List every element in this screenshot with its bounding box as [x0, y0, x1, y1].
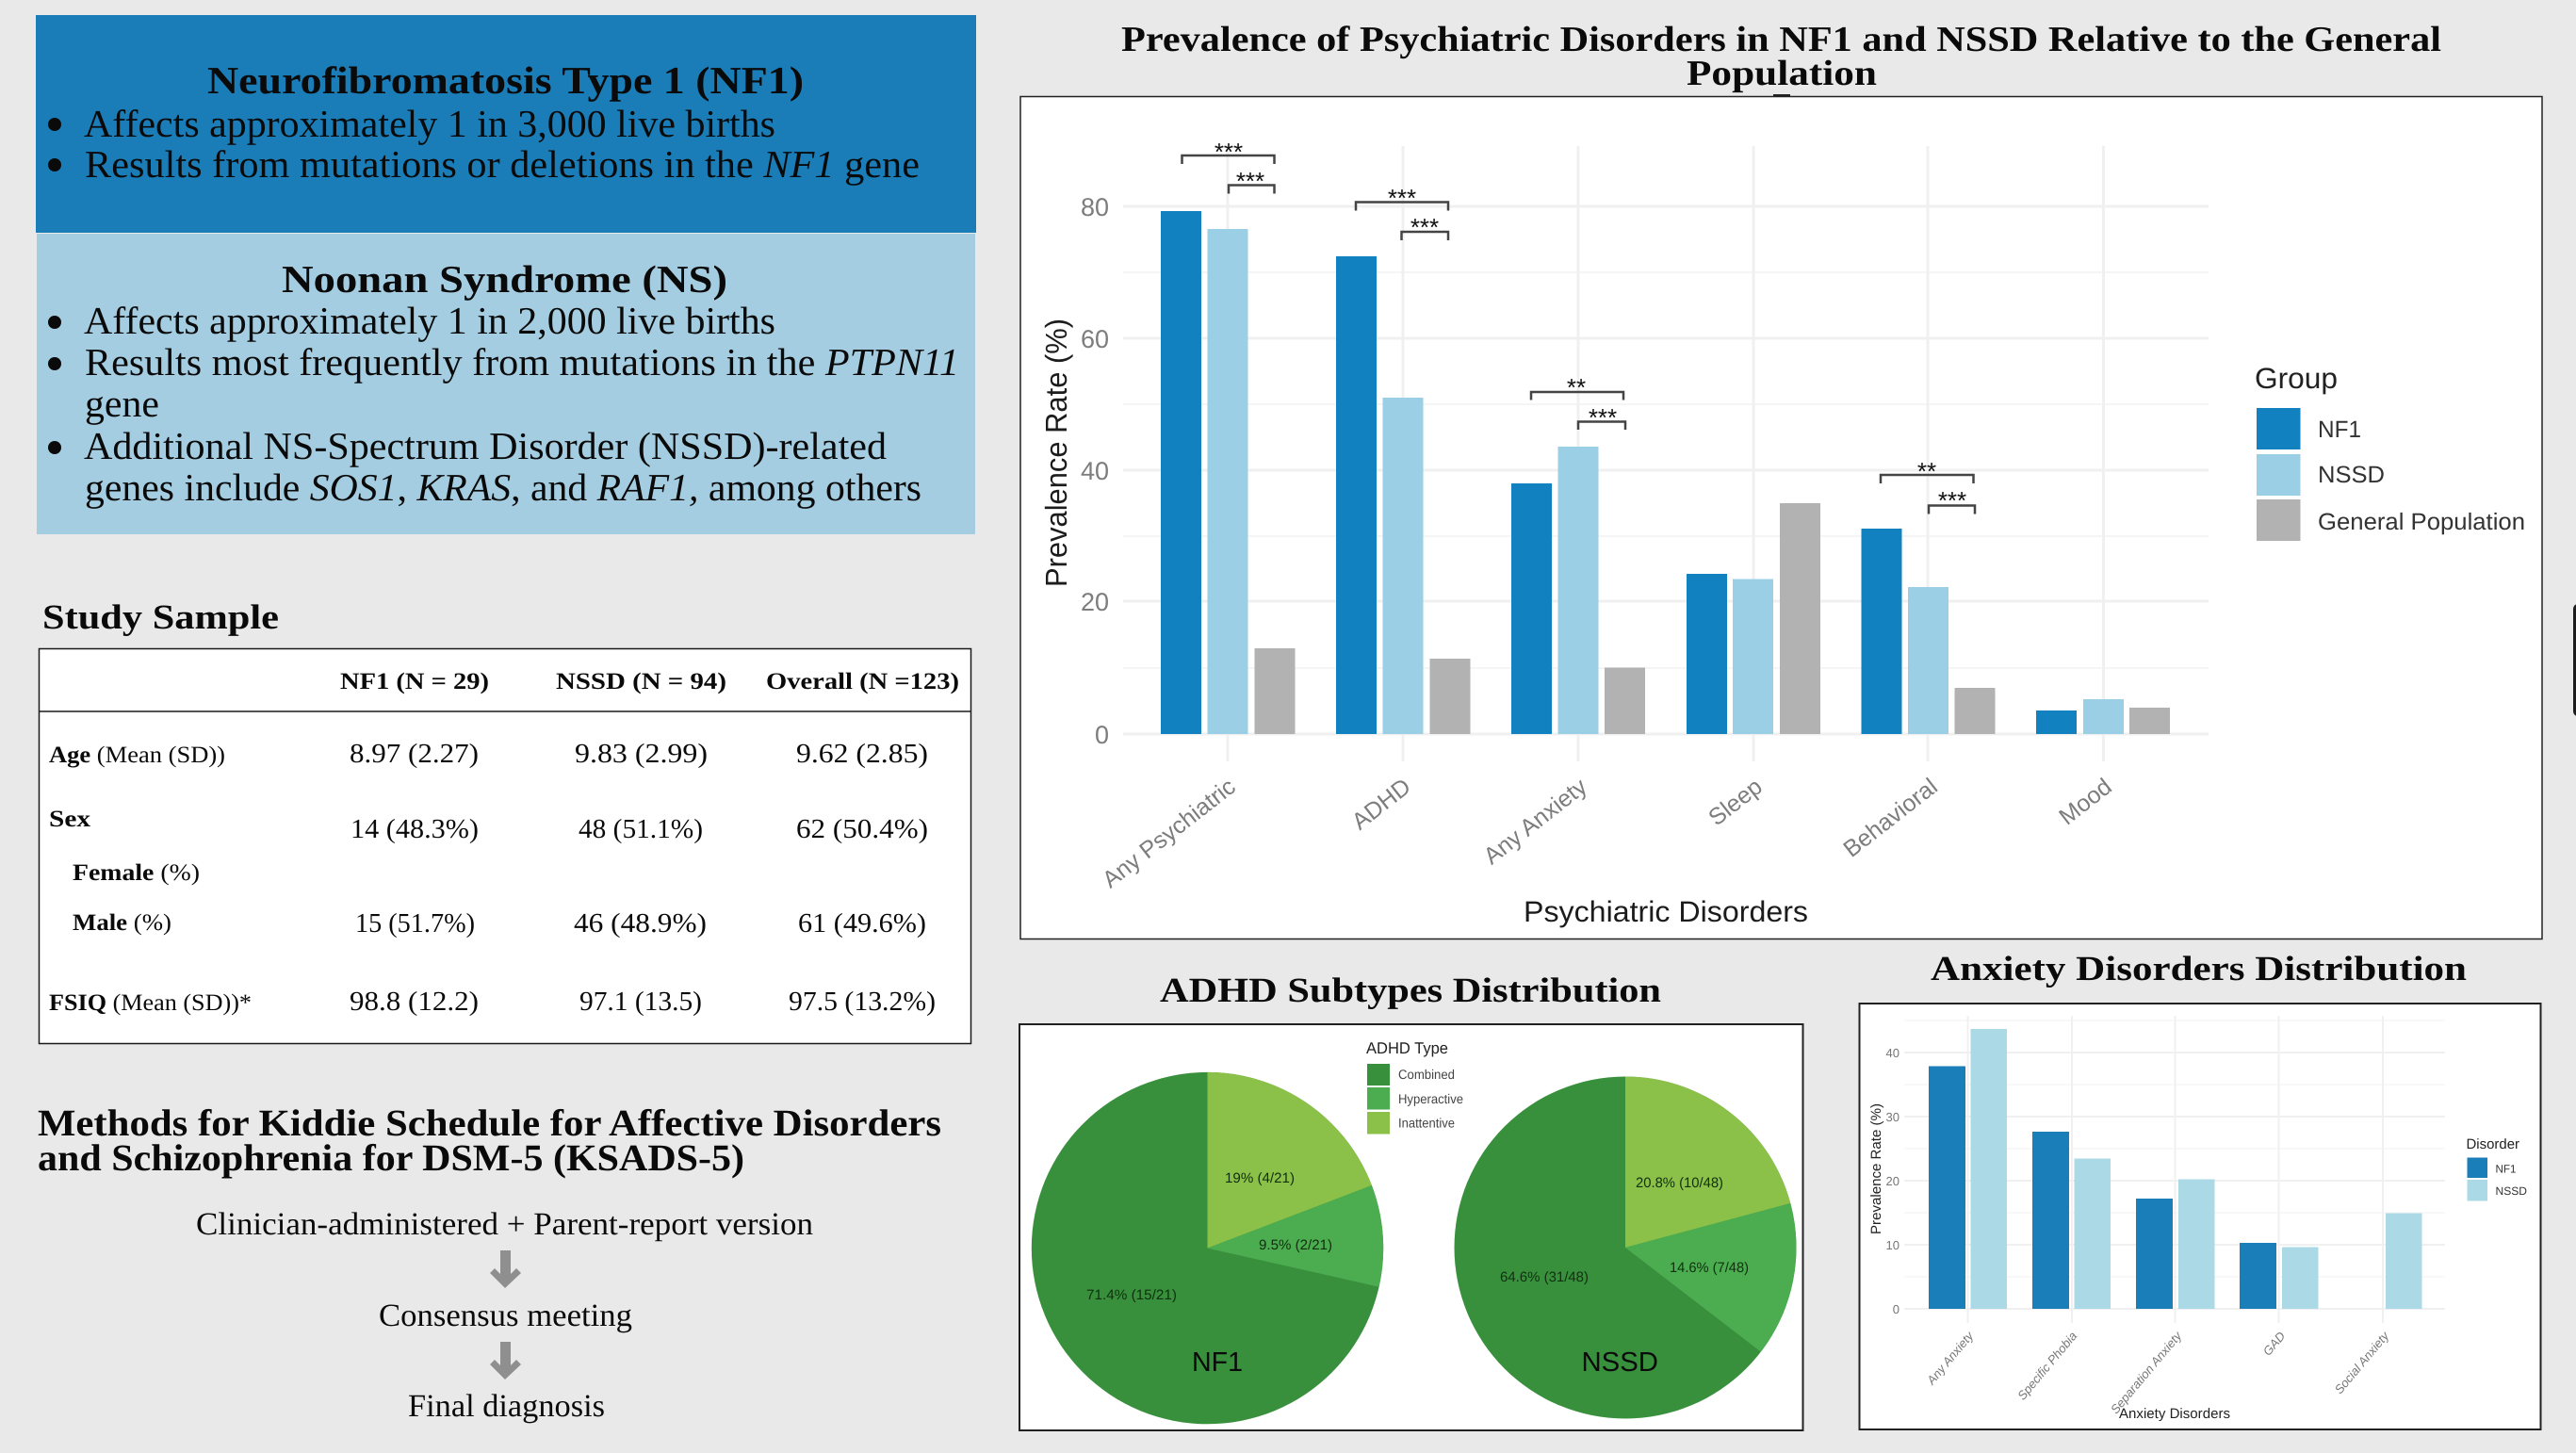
bullet list: NF1 facts — [48, 102, 920, 186]
y axis tick labels — [1081, 193, 1109, 749]
bullet list: NF1 facts: Affects approximately 1 in 3,000 live births — [84, 102, 775, 145]
heading: Methods for KSADS-5 — [38, 1102, 941, 1179]
text: step 1: Clinician-administered + Parent-report version — [196, 1207, 813, 1242]
x axis tick labels: Any Psychiatric — [1098, 774, 1241, 893]
pie: NSSD: 20.8% (10/48) — [1636, 1175, 1723, 1191]
y axis tick labels: 10 — [1886, 1238, 1899, 1252]
table values: 97.1 (13.5) — [579, 987, 702, 1017]
panel: main prevalence bar chart — [1020, 96, 2542, 939]
bullet list: NS facts: Additional NS-Spectrum Disorder (NSSD)-related — [84, 424, 887, 467]
x axis tick labels — [1923, 1328, 2392, 1416]
legend: ADHD Type — [1366, 1039, 1463, 1135]
table row labels: Male (%) — [73, 910, 171, 936]
pie: NF1 — [1032, 1072, 1383, 1424]
significance brackets: *** — [1388, 184, 1416, 212]
table values: 15 (51.7%) — [355, 908, 475, 939]
legend: Disorder — [2467, 1136, 2527, 1200]
x axis title: Psychiatric Disorders — [1524, 895, 1808, 928]
y axis tick labels: 20 — [1886, 1174, 1899, 1188]
pie: NF1: 19% (4/21) — [1225, 1170, 1295, 1186]
x axis tick labels: Behavioral — [1838, 774, 1943, 862]
text: step 3: Final diagnosis — [408, 1389, 605, 1424]
pie: NF1: 9.5% (2/21) — [1259, 1237, 1332, 1253]
heading: main chart title: Prevalence of Psychiatric Disorders in NF1 and NSSD Relative to the General — [1121, 20, 2441, 59]
bullet list: NS facts: gene — [85, 382, 159, 425]
heading: ADHD subtypes: ADHD Subtypes Distribution — [1160, 971, 1661, 1010]
legend: Group — [2255, 362, 2525, 541]
panel: Neurofibromatosis Type 1 — [36, 15, 976, 233]
legend: ADHD Type: Combined — [1398, 1067, 1455, 1082]
bullet list: NF1 facts: Results from mutations or deletions in the NF1 gene — [85, 142, 920, 186]
pie: NSSD: 14.6% (7/48) — [1670, 1260, 1749, 1276]
bars: NF1 — [1161, 211, 2077, 734]
legend: ADHD Type: ADHD Type — [1366, 1039, 1448, 1057]
bullet list: NS facts: Results most frequently from mutations in the PTPN11 — [85, 340, 959, 384]
bullet list: NS facts: genes include SOS1, KRAS, and RAF1, among others — [85, 465, 921, 509]
table row labels: FSIQ (Mean (SD))* — [49, 990, 252, 1016]
heading: Methods for KSADS-5: Methods for Kiddie Schedule for Affective Disorders — [38, 1102, 941, 1144]
significance brackets: *** — [1589, 403, 1617, 432]
pie: NSSD: 64.6% (31/48) — [1500, 1269, 1589, 1285]
arrow: step 1 to step 2 — [490, 1250, 521, 1288]
significance brackets: ** — [1567, 373, 1586, 401]
table values: 9.83 (2.99) — [575, 739, 708, 769]
panel: anxiety bar chart — [1860, 1004, 2540, 1429]
x axis tick labels: Specific Phobia — [2014, 1329, 2079, 1403]
panel: Noonan Syndrome — [37, 234, 975, 534]
legend: ADHD Type: Hyperactive — [1398, 1091, 1463, 1106]
table values: 97.5 (13.2%) — [789, 987, 936, 1017]
table row labels: Female (%) — [73, 860, 200, 886]
x axis tick labels: Any Anxiety — [1479, 773, 1592, 870]
table row labels — [49, 743, 252, 1016]
x axis tick labels: Any Anxiety — [1923, 1328, 1977, 1388]
artifact: dark tab at right edge — [2573, 604, 2576, 716]
x axis tick labels: Social Anxiety — [2332, 1328, 2392, 1396]
y axis tick labels — [1886, 1046, 1899, 1316]
table values: 62 (50.4%) — [796, 814, 928, 844]
x axis tick labels: Separation Anxiety — [2108, 1328, 2185, 1416]
x axis tick labels: Sleep — [1704, 774, 1768, 831]
table values — [350, 739, 936, 1017]
bars: NF1 — [1929, 1067, 2276, 1309]
pie: NSSD: NSSD — [1581, 1347, 1658, 1378]
y axis tick labels: 30 — [1886, 1110, 1899, 1124]
legend: Disorder: NF1 — [2495, 1163, 2517, 1176]
heading: Anxiety disorders: Anxiety Disorders Distribution — [1931, 950, 2467, 988]
y axis tick labels: 0 — [1095, 721, 1109, 749]
significance brackets: *** — [1215, 138, 1243, 166]
x axis title: Anxiety Disorders — [2119, 1406, 2230, 1422]
y axis title: Prevalence Rate (%) — [1868, 1103, 1884, 1234]
table values: 61 (49.6%) — [798, 908, 926, 939]
y axis tick labels: 0 — [1893, 1302, 1899, 1316]
significance brackets: *** — [1410, 213, 1439, 241]
bullet list: NS facts — [48, 299, 959, 509]
y axis tick labels: 60 — [1081, 325, 1109, 353]
y axis tick labels: 40 — [1886, 1046, 1899, 1060]
legend: Group: NSSD — [2318, 462, 2385, 488]
legend: Disorder: NSSD — [2495, 1184, 2527, 1198]
table values: 9.62 (2.85) — [796, 739, 928, 769]
legend: Group: General Population — [2318, 509, 2525, 535]
table values: 8.97 (2.27) — [350, 739, 479, 769]
pie: NSSD — [1455, 1076, 1796, 1419]
table: study sample — [39, 648, 971, 1044]
table values: 48 (51.1%) — [579, 814, 703, 844]
y axis title: Prevalence Rate (%) — [1039, 318, 1073, 587]
x axis tick labels: ADHD — [1347, 774, 1416, 835]
y axis tick labels: 20 — [1081, 588, 1109, 616]
legend: Group: NF1 — [2318, 416, 2361, 443]
x axis tick labels — [1098, 773, 2117, 893]
heading: Methods for KSADS-5: and Schizophrenia for DSM-5 (KSADS-5) — [38, 1136, 744, 1179]
table values: 14 (48.3%) — [351, 814, 479, 844]
heading: NF1: Neurofibromatosis Type 1 (NF1) — [207, 58, 804, 102]
table header: NF1 (N = 29) — [340, 669, 489, 694]
table header: Overall (N =123) — [766, 669, 959, 694]
x axis tick labels: Mood — [2054, 774, 2117, 830]
table header — [340, 669, 959, 694]
text: step 2: Consensus meeting — [379, 1298, 632, 1333]
significance brackets — [1182, 138, 1975, 514]
table row labels: Sex — [49, 807, 91, 832]
bars: NSSD — [1971, 1029, 2421, 1309]
heading: main chart title: Population — [1687, 54, 1877, 93]
legend: Group: Group — [2255, 362, 2338, 395]
panel: ADHD subtype pies — [1019, 1024, 1803, 1430]
pie: NF1: NF1 — [1192, 1347, 1243, 1378]
table values: 46 (48.9%) — [574, 908, 707, 939]
bars: NSSD — [1208, 229, 2124, 734]
y axis tick labels: 80 — [1081, 193, 1109, 221]
x axis tick labels: GAD — [2260, 1329, 2288, 1359]
bullet list: NS facts: Affects approximately 1 in 2,000 live births — [84, 299, 775, 342]
pie: NF1: 71.4% (15/21) — [1086, 1287, 1177, 1303]
heading: NS: Noonan Syndrome (NS) — [282, 257, 727, 301]
table values: 98.8 (12.2) — [350, 987, 479, 1017]
legend: ADHD Type: Inattentive — [1398, 1116, 1455, 1131]
table header: NSSD (N = 94) — [556, 669, 726, 694]
heading: main chart title — [1121, 20, 2441, 93]
y axis tick labels: 40 — [1081, 457, 1109, 485]
heading: Study Sample: Study Sample — [42, 598, 279, 637]
legend: Disorder: Disorder — [2467, 1136, 2519, 1152]
bars: General Population — [1255, 503, 2170, 734]
significance brackets: *** — [1236, 167, 1264, 195]
table row labels: Age (Mean (SD)) — [49, 743, 225, 768]
significance brackets: *** — [1938, 486, 1966, 514]
significance brackets: ** — [1917, 457, 1936, 485]
arrow: step 2 to step 3 — [490, 1342, 521, 1380]
